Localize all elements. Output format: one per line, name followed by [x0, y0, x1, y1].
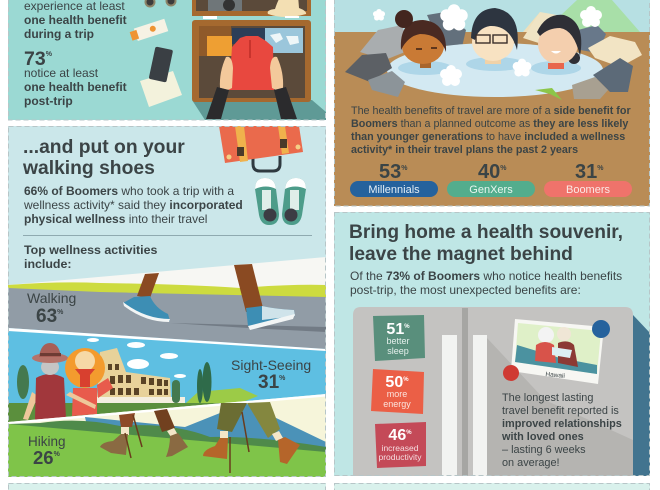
sticky note: 46% increased productivity: productivity: [378, 452, 422, 462]
illustration: fridge: [353, 307, 650, 476]
sticky note: 50% more energy: energy: [383, 399, 411, 409]
text: longest lasting benefit: on average!: [502, 457, 560, 469]
icon: green sneakers: [255, 178, 306, 225]
stat: millennials 53%: 53: [379, 161, 401, 183]
sticky note: 51% better sleep: [373, 315, 425, 361]
stat: genxers 40%: [447, 161, 535, 197]
label: hiking 26%: Hiking: [28, 434, 66, 449]
sticky note: 50% more energy: 50: [385, 374, 403, 391]
illustration: tourist couple: [23, 343, 113, 420]
illustration: sky and mountains: [334, 0, 650, 32]
sticky note: 50% more energy: [371, 369, 424, 414]
band: sight-seeing: 31: [258, 372, 279, 393]
band: hiking: %: [54, 451, 61, 458]
text: side benefit paragraph: Boomers: [351, 118, 398, 130]
photo magnet: hawaii: Hawaii: [545, 371, 565, 380]
stat: millennials 53%: Millennials: [368, 184, 420, 196]
illustration: clouds: [87, 338, 186, 378]
sticky note: 51% better sleep: %: [404, 324, 410, 330]
panel: walking shoes: [8, 126, 326, 477]
stat: boomers 31%: Boomers: [566, 184, 611, 196]
sticky note: 51% better sleep: better: [386, 336, 410, 346]
band: sight-seeing: [8, 328, 326, 424]
text: 66% of Boomers: wellness activity* said they: [23, 198, 169, 212]
sticky note: 50% more energy: %: [403, 377, 409, 383]
illustration: hot spring pool: [387, 43, 603, 97]
text: of the 73% of boomers: Of the 73% of Boomers who notice health benefits: [350, 269, 622, 283]
panel: health souvenir: [334, 212, 650, 476]
stat: boomers 31%: %: [597, 165, 604, 172]
text: of the 73% of boomers: post-trip, the most unexpected benefits are:: [350, 283, 581, 297]
band: walking: %: [57, 309, 64, 316]
text: 66% of Boomers: incorporated: [169, 198, 243, 212]
panel: next section right: [334, 483, 650, 490]
illustration: steam clouds: [373, 4, 602, 86]
sticky note: 50% more energy: more: [387, 389, 407, 399]
illustration: rocks around pool: [345, 36, 642, 100]
icon: phone on map: [140, 46, 182, 107]
text: 73% post-trip stat: post-trip: [24, 94, 73, 108]
text: side benefit paragraph: to have included a wellness: [486, 131, 625, 143]
heading: and put on your walking shoes: ...and put on your: [23, 137, 185, 158]
icon: sunscreen tube: [129, 19, 168, 43]
photo magnet: hawaii: [503, 319, 610, 384]
stat: millennials 53%: [350, 161, 438, 197]
panel: hot spring side benefit: [334, 0, 650, 206]
text: longest lasting benefit: The longest lasting: [502, 392, 593, 404]
stat: genxers 40%: 40: [478, 161, 500, 183]
illustration: three bathers: [395, 8, 581, 69]
text: side benefit paragraph: than younger generations: [351, 131, 483, 143]
text: longest lasting benefit: improved relationships: [502, 418, 622, 430]
panel: next section left: [8, 483, 326, 490]
text: side benefit paragraph: activity* in their travel plans the past 2 years: [351, 144, 578, 156]
stat: millennials 53%: %: [401, 165, 408, 172]
illustration: rocks behind pool: [360, 12, 606, 60]
text: 73% post-trip stat: one health benefit: [24, 80, 127, 94]
text: top wellness activities: Top wellness activities: [24, 243, 157, 257]
panel: health benefit stats: [8, 0, 326, 120]
band: sight-seeing: %: [279, 375, 286, 382]
sticky note: 46% increased productivity: 46: [388, 427, 406, 444]
stat: genxers 40%: GenXers: [469, 184, 513, 196]
stat: genxers 40%: %: [500, 165, 507, 172]
heading: bring home a health souvenir: Bring home a health souvenir,: [349, 222, 623, 243]
text: 73% post-trip stat: %: [46, 51, 53, 58]
label: walking 63%: Walking: [27, 290, 76, 306]
text: 73% post-trip stat: notice at least: [24, 66, 99, 80]
text: longest lasting benefit: – lasting 6 weeks: [502, 444, 586, 456]
band: hiking: [8, 394, 326, 477]
text: side benefit paragraph: than a planned outcome as they are less likely: [401, 118, 628, 130]
illustration: walker's legs: [123, 264, 326, 332]
icon: red suitcase: [219, 126, 303, 171]
illustration: colosseum: [97, 348, 185, 405]
heading: and put on your walking shoes: walking shoes: [22, 158, 155, 179]
text: top wellness activities: include:: [24, 257, 72, 271]
illustration: hikers' legs and poles: [100, 402, 300, 473]
sticky note: 46% increased productivity: increased: [382, 443, 419, 453]
sticky note: 51% better sleep: 51: [386, 321, 404, 338]
sticky note: 51% better sleep: sleep: [387, 346, 409, 356]
text: during trip stat: one health benefit: [24, 13, 127, 27]
text: during trip stat: during a trip: [24, 27, 94, 41]
sticky note: 46% increased productivity: [375, 422, 426, 468]
label: sight-seeing 31%: Sight-Seeing: [231, 357, 311, 373]
text: side benefit paragraph: The health benefits of travel are more of a side benefit for: [351, 105, 631, 117]
band: walking: 63: [36, 306, 57, 327]
text: 66% of Boomers: 66% of Boomers who took a trip with a: [24, 184, 234, 198]
icon: sunglasses: [144, 0, 176, 8]
illustration: trees and hills: [8, 362, 326, 424]
band: hiking: 26: [33, 447, 54, 468]
band: walking: [8, 257, 326, 350]
stat: boomers 31%: [544, 161, 632, 197]
heading: bring home a health souvenir: leave the magnet behind: [349, 244, 573, 265]
text: 73% post-trip stat: 73: [24, 48, 46, 70]
sticky note: 46% increased productivity: %: [406, 430, 412, 436]
stat: boomers 31%: 31: [575, 161, 597, 183]
text: 66% of Boomers: into their travel: [129, 212, 207, 226]
text: longest lasting benefit: with loved ones: [501, 431, 584, 443]
text: longest lasting benefit: travel benefit reported is: [502, 405, 619, 417]
illustration: open suitcase: [192, 0, 326, 120]
text: 66% of Boomers: physical wellness: [24, 212, 126, 226]
